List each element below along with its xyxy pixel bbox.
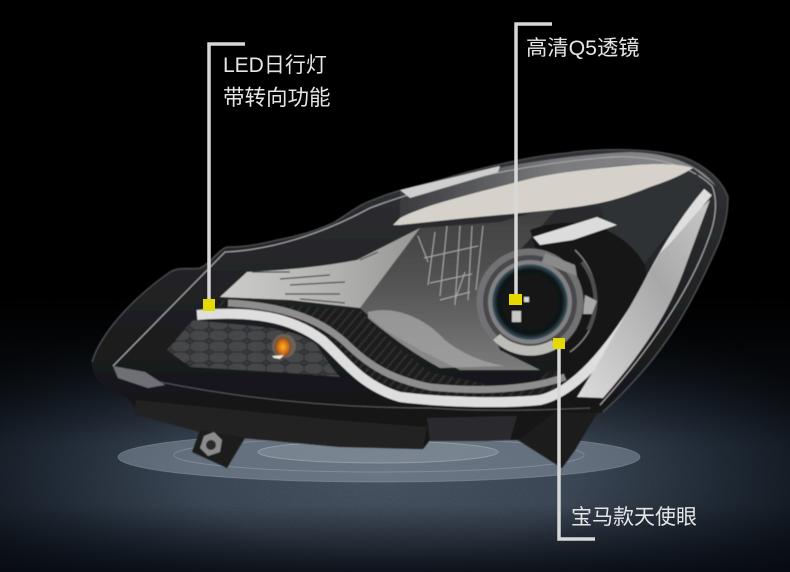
leader line 3 [559, 345, 595, 539]
amber bulb [272, 334, 296, 359]
floor glow ellipses [118, 432, 640, 482]
lower textured housing [427, 416, 517, 441]
upper crescent bezel [393, 164, 693, 225]
label 1: LED日行灯 [223, 54, 327, 77]
leader line 1 [209, 44, 245, 302]
chrome strip [228, 303, 565, 390]
projector bracket [583, 295, 597, 314]
lens edge highlight [92, 150, 728, 412]
callout: LED daytime running light [203, 44, 331, 311]
left lens corner [113, 366, 165, 388]
right side wedge [577, 200, 710, 398]
mounting rail [134, 400, 427, 449]
top trim highlight [400, 166, 500, 198]
left bracket with bolt [192, 430, 245, 468]
headlamp [92, 150, 728, 468]
reflector light patch [368, 310, 505, 368]
right bracket [518, 412, 597, 468]
turn signal cluster [167, 320, 340, 377]
leader line 2 [516, 24, 552, 296]
projector shroud [530, 223, 646, 380]
callout: angel eye [553, 338, 697, 539]
central reflector [360, 205, 560, 370]
white DRL strip [197, 192, 708, 402]
projector lens [476, 248, 584, 356]
marker 3 [553, 338, 565, 349]
lamp housing body [92, 150, 728, 468]
dark inner right area [600, 174, 700, 270]
inner lens line [113, 157, 715, 405]
reflector sparkle lines [418, 226, 483, 305]
dark ribbed band [215, 300, 580, 400]
rail upper light line [160, 382, 590, 410]
projector segment ring [570, 250, 596, 352]
label 2: 高清Q5透镜 [526, 36, 640, 60]
marker 1 [203, 299, 215, 311]
shroud highlight [533, 217, 617, 245]
callout: Q5 lens [509, 24, 640, 305]
top lens band [400, 152, 716, 222]
marker 2 [509, 294, 522, 305]
label 1 second line: 带转向功能 [223, 86, 331, 110]
upper grey reflector panel [220, 228, 420, 308]
label 3: 宝马款天使眼 [571, 506, 697, 529]
